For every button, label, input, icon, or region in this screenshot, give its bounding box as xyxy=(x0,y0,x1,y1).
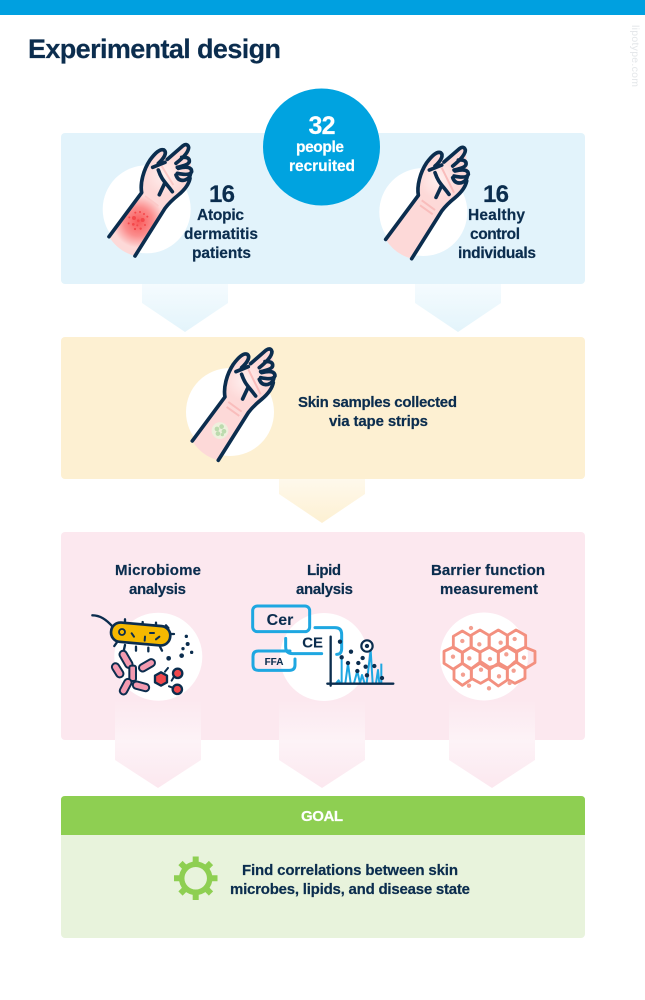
text: healthy control individuals: Healthy xyxy=(468,207,525,224)
text: skin samples: via tape strips xyxy=(329,413,428,430)
text: atopic dermatitis patients xyxy=(184,181,258,262)
panel: sample collection xyxy=(61,337,585,479)
arrow: controls to samples right xyxy=(415,284,501,332)
arrow: samples to analysis xyxy=(279,479,365,523)
watermark: lipotype.com xyxy=(629,25,641,87)
text: goal statement: microbes, lipids, and disease state xyxy=(230,881,470,898)
arrow: lipid to goal xyxy=(279,700,365,788)
heading: microbiome analysis: analysis xyxy=(129,581,186,598)
title: Experimental design xyxy=(28,34,281,64)
goal label: GOAL xyxy=(301,808,343,825)
text: atopic dermatitis patients: Atopic xyxy=(197,207,244,224)
heading: lipid analysis xyxy=(296,562,353,598)
arrow: barrier to goal xyxy=(449,700,535,788)
heading: lipid analysis: analysis xyxy=(296,581,353,598)
panel: goal xyxy=(61,796,585,938)
circle: 32 people recruited: people xyxy=(296,139,344,156)
text: goal statement xyxy=(230,862,470,898)
text: atopic dermatitis patients: 16 xyxy=(209,181,235,208)
icon: healthy arm xyxy=(379,147,468,259)
circle: 32 people recruited: 32 xyxy=(308,112,336,140)
goal header xyxy=(61,796,585,835)
circle: 32 people recruited: recruited xyxy=(289,158,355,175)
icon: skin barrier hexagons xyxy=(440,612,535,700)
arrow: patients to samples left xyxy=(142,284,228,332)
icon: atopic dermatitis arm xyxy=(103,145,192,256)
heading: microbiome analysis: Microbiome xyxy=(115,562,201,579)
text: healthy control individuals xyxy=(458,181,536,262)
icon: lipid chart xyxy=(253,606,393,701)
top bar xyxy=(0,0,645,15)
icon: lipid chart: CE xyxy=(302,634,323,651)
heading: microbiome analysis xyxy=(115,562,201,598)
heading: barrier function measurement: Barrier function xyxy=(431,562,545,579)
heading: lipid analysis: Lipid xyxy=(307,562,341,579)
text: atopic dermatitis patients: patients xyxy=(192,245,251,262)
text: atopic dermatitis patients: dermatitis xyxy=(184,226,258,243)
icon: gear xyxy=(174,856,218,900)
text: healthy control individuals: control xyxy=(470,226,520,243)
text: skin samples xyxy=(298,394,457,430)
circle: 32 people recruited xyxy=(263,88,380,206)
icon: lipid chart: FFA xyxy=(265,657,283,668)
text: skin samples: Skin samples collected xyxy=(298,394,457,411)
text: goal statement: Find correlations between skin xyxy=(242,862,458,879)
icon: arm with tape strip xyxy=(186,349,275,460)
heading: barrier function measurement: measurement xyxy=(440,581,538,598)
panel: analyses xyxy=(61,532,585,740)
icon: microbes xyxy=(92,613,202,701)
panel: recruitment xyxy=(61,133,585,284)
icon: lipid chart: Cer xyxy=(267,612,293,629)
heading: barrier function measurement xyxy=(431,562,545,598)
text: healthy control individuals: 16 xyxy=(483,181,509,208)
arrow: microbiome to goal xyxy=(115,700,201,788)
text: healthy control individuals: individuals xyxy=(458,245,536,262)
